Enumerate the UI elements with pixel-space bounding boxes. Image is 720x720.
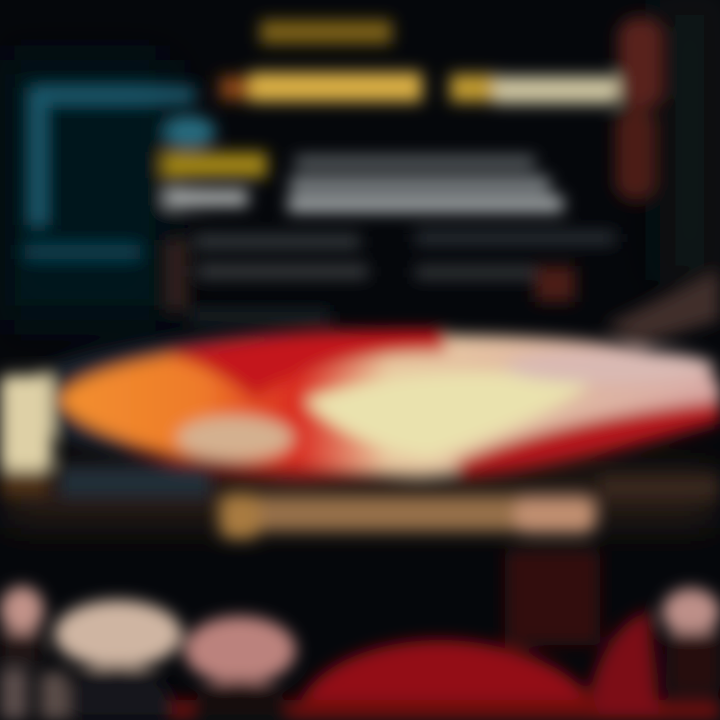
cream centre [305,372,590,458]
bowl: third [184,616,296,720]
left cream object [0,375,52,496]
text block: dim lines [166,232,615,322]
title main line [220,72,618,104]
pale pink right [505,350,715,384]
bowl: far left [0,586,44,720]
title small label [260,20,392,44]
teal frame [25,95,195,252]
background glow [0,0,720,514]
bowl: second [40,600,182,720]
text block: white lines [166,156,563,212]
cream item left [177,416,293,460]
dark red box [505,550,600,645]
sushi plate: main surface [58,335,720,476]
dark red decoration: top right [615,18,662,200]
right side diagonal object [605,270,720,345]
board below plate [60,466,720,539]
subtitle gold label [163,152,267,178]
red floor [160,610,720,720]
teal glow icon [164,116,216,148]
table shadow rim [10,330,670,470]
red upper band [165,330,445,400]
bowl: right [662,588,720,692]
red lower band [455,400,720,476]
